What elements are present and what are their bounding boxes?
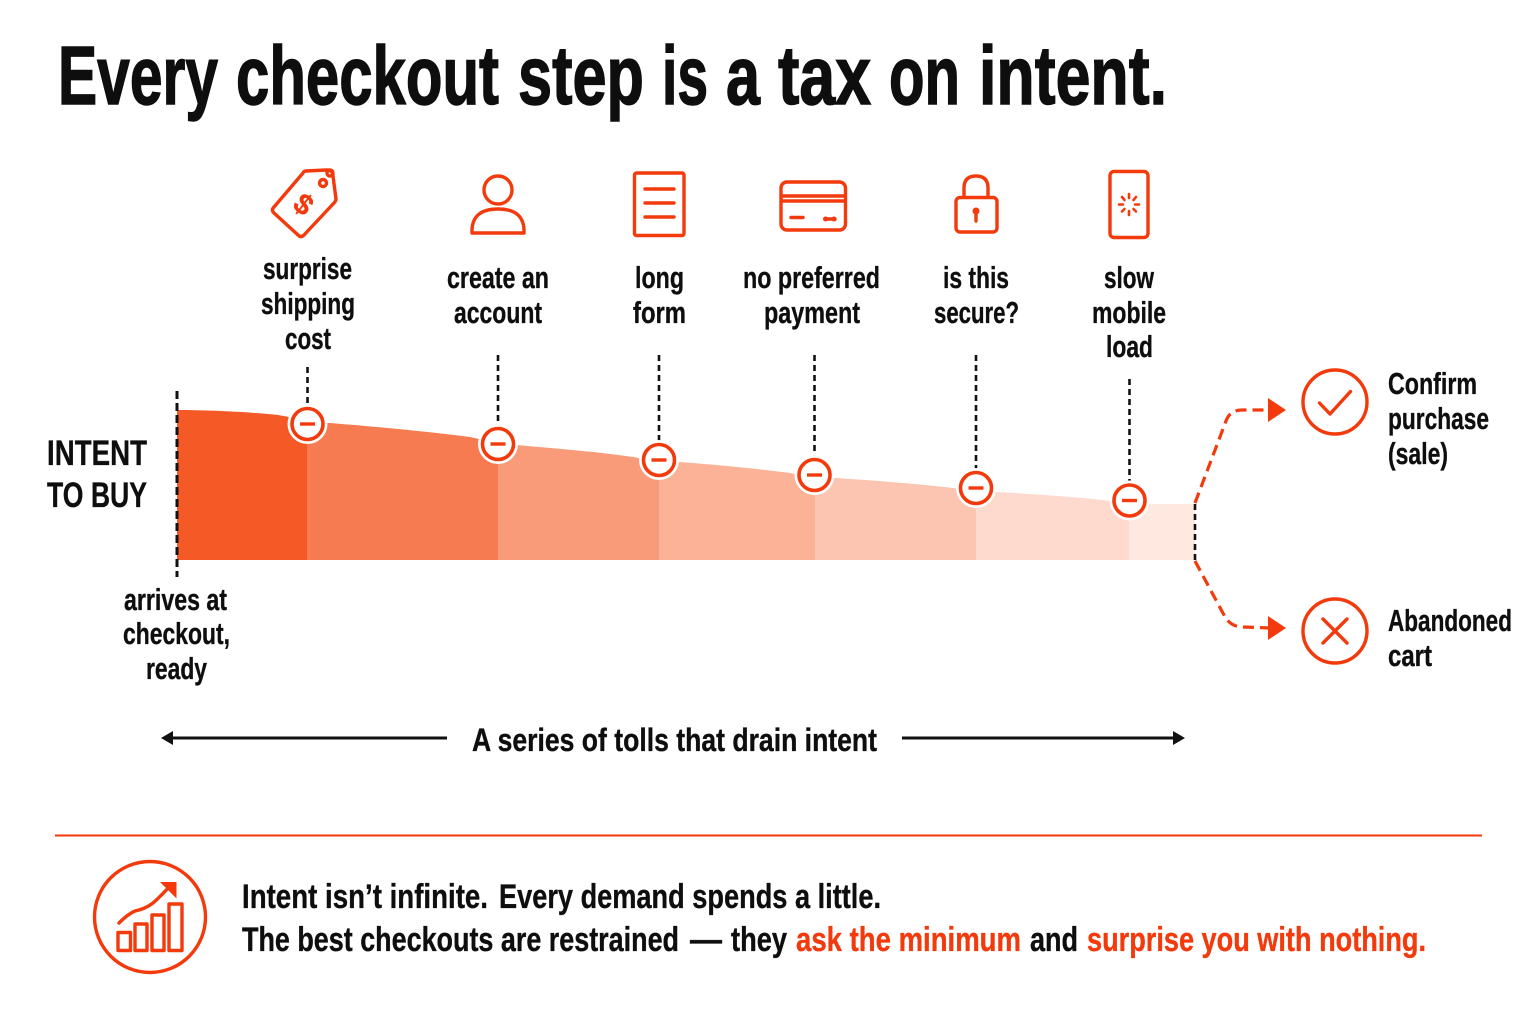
label: mobile: [1092, 295, 1166, 330]
icon: padlock: [956, 176, 997, 232]
label: create an: [447, 260, 549, 295]
label: [1388, 366, 1489, 471]
label: form: [633, 295, 686, 330]
takeaway text: and: [1030, 921, 1078, 959]
label: [1092, 260, 1166, 364]
start label: arrives at: [124, 582, 227, 617]
y axis label: TO BUY: [47, 476, 147, 515]
label: Confirm: [1388, 366, 1477, 401]
icon: form document: [634, 173, 684, 236]
step 4: no preferred payment: [743, 182, 880, 495]
label: load: [1106, 329, 1153, 364]
title: intent.: [979, 29, 1167, 122]
connector: [813, 355, 816, 458]
outcome: confirm purchase: [1303, 366, 1489, 471]
outcome: abandoned cart: [1303, 599, 1512, 673]
label: (sale): [1388, 436, 1448, 471]
label: cart: [1388, 638, 1432, 673]
label: [633, 260, 686, 330]
title: checkout: [236, 29, 499, 122]
title: [58, 29, 1167, 122]
connector: [658, 355, 660, 443]
step 1: surprise shipping cost: [261, 170, 355, 444]
takeaway text: ask the minimum: [796, 921, 1021, 959]
label: [934, 260, 1019, 330]
y axis label: [47, 434, 147, 515]
title: Every: [58, 29, 218, 122]
label: payment: [764, 295, 860, 330]
label: purchase: [1388, 401, 1489, 436]
icon: price tag: [272, 170, 336, 236]
connector: [306, 367, 309, 407]
connector: [497, 355, 499, 427]
toll marker: [794, 455, 834, 495]
icon: cross circle: [1303, 599, 1367, 663]
start marker line: [176, 391, 178, 577]
arrow: to confirm purchase: [1195, 398, 1286, 503]
icon: price tag: $: [287, 187, 319, 223]
start label: [123, 582, 230, 686]
right arrow: [902, 731, 1185, 745]
connector: [975, 355, 977, 471]
toll marker: [639, 440, 679, 480]
end marker line: [1194, 504, 1196, 560]
label: no preferred: [743, 260, 880, 295]
icon: check circle: [1303, 370, 1367, 434]
toll marker: [478, 424, 518, 464]
start label: checkout,: [123, 616, 230, 651]
step 3: long form: [633, 173, 686, 480]
title: step: [518, 29, 644, 122]
icon: credit card: [781, 182, 846, 230]
step 6: slow mobile load: [1092, 172, 1166, 520]
icon: phone with spinner: [1110, 172, 1148, 238]
takeaway text: —: [690, 921, 722, 959]
takeaway text: The best checkouts are restrained: [242, 921, 679, 959]
label: [261, 251, 355, 356]
toll marker: [288, 404, 328, 444]
arrow: to abandoned cart: [1195, 561, 1286, 640]
label: [447, 260, 549, 330]
label: surprise: [263, 251, 352, 286]
takeaway text: Intent isn’t infinite.: [242, 878, 488, 916]
label: is this: [943, 260, 1009, 295]
toll marker: [956, 468, 996, 508]
label: [1388, 603, 1512, 673]
toll marker: [1110, 480, 1150, 520]
step 5: is this secure: [934, 176, 1019, 508]
connector: [1128, 379, 1131, 484]
title: a: [726, 29, 761, 122]
takeaway text: Every demand spends a little.: [499, 878, 881, 916]
label: long: [635, 260, 684, 295]
label: account: [454, 295, 542, 330]
caption: series of tolls: A series of tolls that drain intent: [472, 722, 877, 758]
y axis label: INTENT: [47, 434, 147, 473]
title: is: [662, 29, 708, 122]
chart: intent area declining across checkout steps: [177, 410, 1195, 560]
title: tax: [778, 29, 871, 122]
icon: person: [472, 176, 524, 233]
label: secure?: [934, 295, 1019, 330]
title: on: [889, 29, 960, 122]
left arrow: [161, 731, 447, 745]
label: slow: [1104, 260, 1155, 295]
label: cost: [285, 321, 331, 356]
takeaway text: they: [731, 921, 787, 959]
start label: ready: [146, 651, 208, 686]
icon: rising bar chart in circle: [94, 862, 206, 972]
step 2: create an account: [447, 176, 549, 464]
label: [743, 260, 880, 330]
takeaway text: surprise you with nothing.: [1087, 921, 1426, 959]
label: shipping: [261, 286, 355, 321]
takeaway text: [242, 878, 1426, 959]
